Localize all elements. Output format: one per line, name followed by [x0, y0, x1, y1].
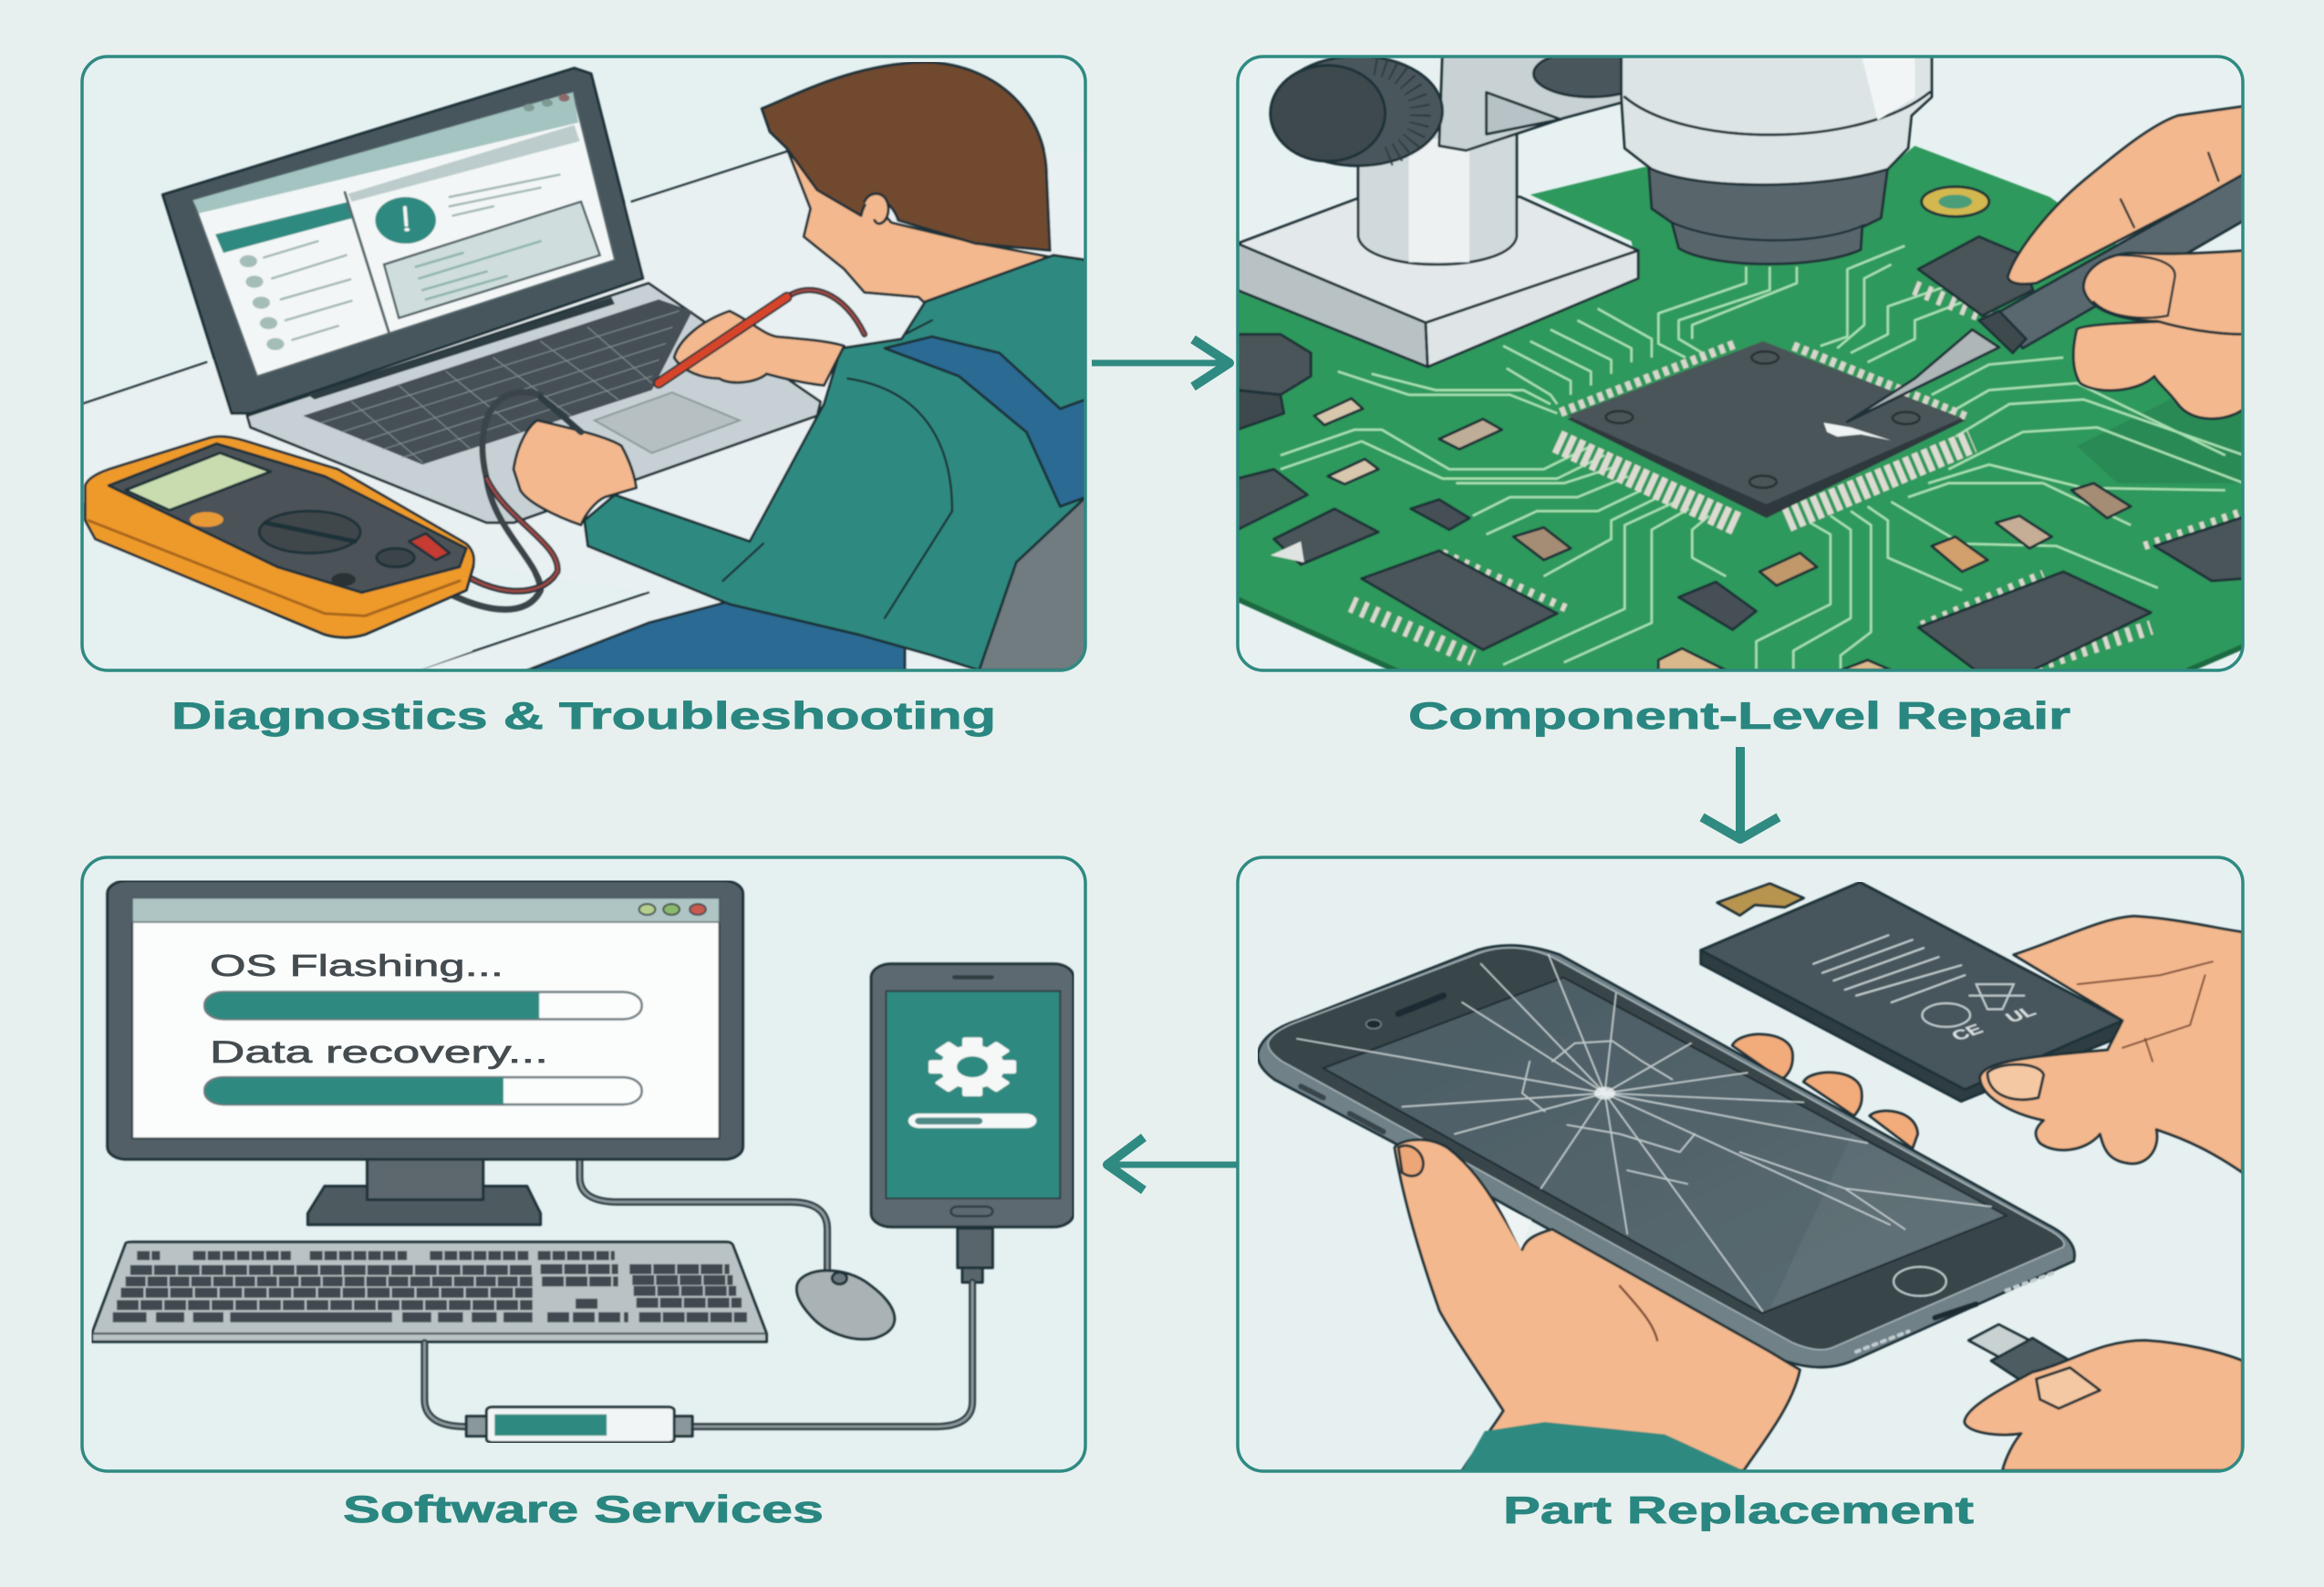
battery label marks: UL — [2002, 1004, 2040, 1026]
right edge chip — [2144, 511, 2244, 581]
technician jeans — [527, 599, 905, 670]
cable: monitor to mouse — [580, 1160, 827, 1272]
screen cracks — [1297, 955, 1991, 1311]
heading: part replacement: Part Replacement — [1503, 1488, 1974, 1531]
phone — [871, 964, 1074, 1227]
hand holding phone — [1395, 1140, 1800, 1470]
screen text: OS flashing: OS Flashing... — [210, 949, 503, 982]
left components — [1238, 335, 1469, 565]
panel: diagnostics and troubleshooting illustration — [82, 57, 1085, 670]
technician jacket — [585, 255, 1085, 670]
hand with red probe — [659, 290, 865, 386]
arrow: part replacement to software services — [1107, 1137, 1245, 1190]
monitor stand — [307, 1157, 541, 1225]
notch in arm — [1487, 92, 1561, 134]
arrow: component repair to part replacement — [1702, 747, 1779, 839]
heading: component-level repair: Component-Level Repair — [1408, 694, 2070, 737]
multimeter — [85, 437, 474, 638]
panel: part replacement illustration — [1238, 857, 2243, 1471]
lower left chip — [1352, 551, 1567, 658]
small chip near hand — [1914, 236, 2033, 325]
focus knob — [1268, 58, 1622, 168]
main chip — [1557, 341, 1972, 525]
hand holding iron: lower and upper fingers — [2008, 107, 2244, 419]
battery label marks: CE — [1948, 1022, 1987, 1044]
cable: phone to adapter — [692, 1229, 992, 1426]
panel border: software services — [82, 857, 1085, 1471]
panel border: diagnostics — [82, 57, 1085, 670]
cable: keyboard to adapter — [424, 1343, 466, 1426]
monitor — [108, 881, 743, 1159]
circuit traces — [1281, 246, 2244, 669]
circuit board — [1233, 146, 2244, 671]
technician chair — [980, 497, 1085, 670]
fingers behind phone — [1732, 1034, 1918, 1148]
microscope arm — [1439, 53, 1624, 150]
panel: component-level repair illustration — [1233, 50, 2244, 671]
laptop — [162, 68, 821, 523]
panel border: part replacement — [1238, 857, 2243, 1471]
technician hair — [762, 62, 1050, 251]
panel: software services illustration — [82, 857, 1085, 1471]
panel border: component-level repair — [1238, 57, 2243, 670]
center small component — [1678, 582, 1757, 630]
microscope column — [1358, 130, 1517, 264]
replacement battery — [1701, 882, 2122, 1101]
resistors — [1314, 399, 2131, 670]
technician ear — [865, 193, 888, 223]
arrow: diagnostics to component repair — [1092, 339, 1229, 387]
soldering iron — [1847, 174, 2244, 421]
microscope base — [1238, 197, 1638, 367]
lower right chip — [1918, 572, 2151, 670]
battery label marks — [1948, 1004, 2040, 1044]
microscope objective — [1622, 53, 1932, 264]
progress adapter — [466, 1407, 692, 1443]
hand with charging connector — [1965, 1324, 2243, 1470]
hand holding iron: thumb — [2083, 251, 2244, 335]
desk surface — [82, 150, 1085, 670]
screen text: data recovery: Data recovery... — [210, 1035, 548, 1070]
heading: software services: Software Services — [343, 1488, 824, 1530]
mouse — [797, 1271, 895, 1339]
broken phone body — [1258, 946, 2074, 1367]
heading: diagnostics and troubleshooting: Diagnostics & Troubleshooting — [171, 694, 996, 737]
hand holding battery — [1980, 917, 2243, 1173]
hand with black probe and leads — [442, 392, 637, 609]
keyboard — [92, 1242, 766, 1342]
technician face and neck — [787, 148, 1053, 316]
